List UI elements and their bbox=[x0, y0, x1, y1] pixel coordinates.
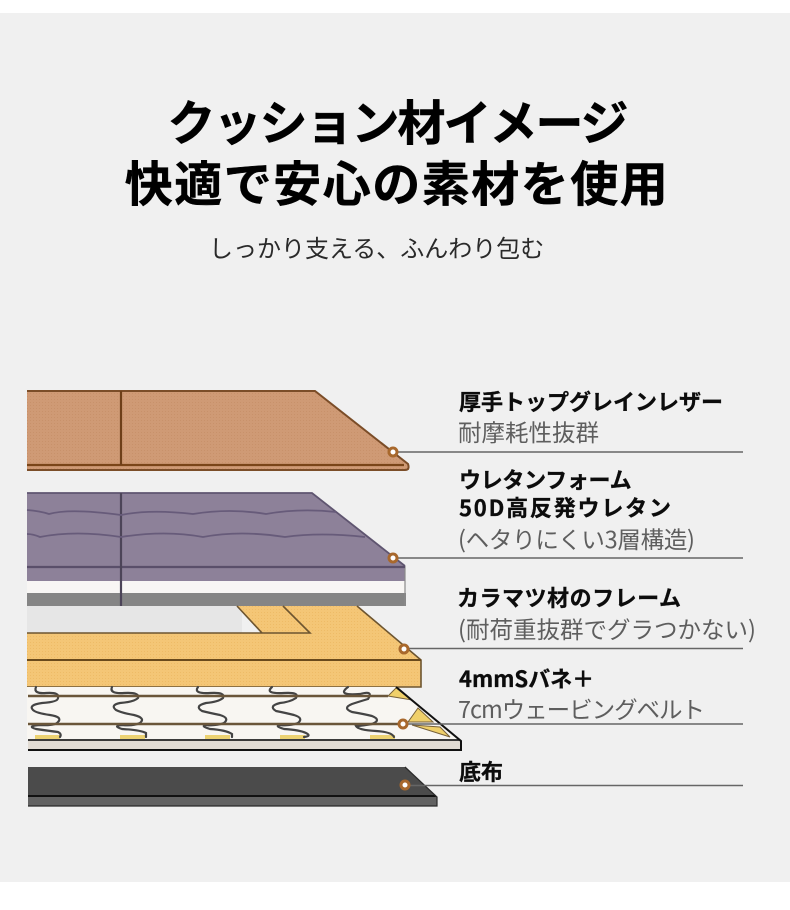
layer: bottom cloth bbox=[28, 767, 437, 806]
label: urethane bbox=[458, 463, 695, 555]
label: leather: 耐摩耗性抜群 bbox=[458, 414, 599, 448]
title bbox=[125, 84, 669, 215]
webbing yellow triangles bbox=[388, 687, 450, 737]
label: springs bbox=[458, 662, 705, 725]
label: urethane: 50D高反発ウレタン bbox=[459, 491, 671, 523]
label: urethane: (ヘタりにくい3層構造) bbox=[458, 521, 695, 555]
label: springs: 7cmウェービングベルト bbox=[458, 691, 705, 725]
layer: larch frame bbox=[27, 606, 421, 687]
spring coils bbox=[32, 687, 394, 737]
layer: springs and webbing belt bbox=[27, 687, 461, 750]
belt pads bbox=[35, 735, 395, 739]
layer: leather bbox=[27, 391, 409, 470]
label: frame: (耐荷重抜群でグラつかない) bbox=[458, 611, 756, 645]
label: springs: 4mmSバネ＋ bbox=[459, 662, 594, 694]
title: クッション材イメージ bbox=[167, 84, 628, 154]
label: leather: 厚手トップグレインレザー bbox=[459, 385, 723, 417]
label: leather bbox=[458, 385, 723, 448]
leader lines bbox=[398, 452, 743, 786]
label: urethane: ウレタンフォーム bbox=[459, 463, 631, 495]
subtitle: しっかり支える、ふんわり包む bbox=[209, 229, 544, 264]
marker dots bbox=[389, 448, 409, 789]
label: frame: カラマツ材のフレーム bbox=[457, 581, 681, 613]
label: bottom cloth: 底布 bbox=[459, 755, 503, 787]
label: frame bbox=[457, 581, 756, 645]
layer: urethane foam bbox=[27, 493, 406, 606]
title: 快適で安心の素材を使用 bbox=[125, 145, 669, 215]
